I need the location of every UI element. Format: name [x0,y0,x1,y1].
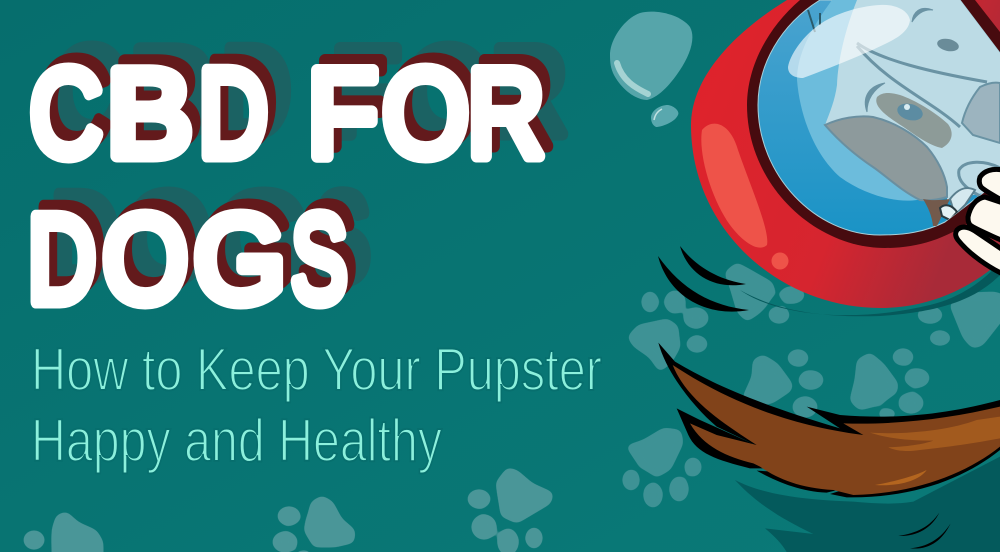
tooth [940,205,957,220]
collar fur [923,199,950,226]
title red shadow: O [391,35,477,173]
water [758,0,1000,235]
paw: lower left of tail [622,430,702,508]
title red shadow: C [38,35,110,173]
second eye [937,38,959,52]
subtitle: Happy and Healthy [31,407,442,474]
title white letters [28,45,545,329]
dog bowl [691,0,1000,308]
paw: bottom centre [467,470,551,552]
dog dark fur [825,116,947,200]
title white letters: O [103,191,188,329]
bowl inner rim [747,0,1000,248]
water drops [610,12,692,127]
title far shadow: B [130,23,216,161]
nose [962,83,1000,143]
title red shadow: R [476,35,553,173]
title far shadow: F [331,23,401,161]
bowl body [691,0,1000,308]
motion lines [658,246,749,312]
paw: bottom left [23,514,101,552]
title red shadow: B [114,35,200,173]
light reflection [797,0,1000,201]
tail fur [673,365,1000,495]
title red shadow: D [36,181,104,319]
title far shadow: C [53,23,125,161]
title white letters: R [468,45,545,183]
paw: right edge [917,294,1000,346]
dog paw fingers [956,169,1000,274]
title white letters: C [30,45,102,183]
paw: under bowl [727,265,805,324]
paw: bottom middle [272,498,353,552]
title white letters: D [199,45,268,183]
eyebrows [865,83,885,112]
title far shadow: R [491,23,568,161]
paw: upper left of tail [630,290,709,369]
title far shadow: S [314,169,370,307]
paw: middle right [852,348,930,420]
glass glare [788,5,910,78]
title white letters: S [291,191,347,329]
title red shadow: D [207,35,276,173]
title far shadow: G [217,169,309,307]
mouth lines [857,43,987,127]
title far shadow: D [51,169,119,307]
dog face [825,0,1000,200]
bowl highlight dot [772,252,788,270]
eye [897,104,923,120]
small drop [651,105,678,127]
fur wisps [808,10,820,32]
title red shadow: S [299,181,355,319]
title white letters: O [383,45,469,183]
title red shadow: G [202,181,294,319]
tail shadow [735,457,1000,552]
title far shadow: O [126,169,211,307]
title white letters: D [28,191,96,329]
title red shadow: O [111,181,196,319]
bowl highlight [701,124,767,248]
title red shadow [36,35,553,319]
tongue [950,188,975,215]
finger 1 [979,169,1000,201]
paw: middle [745,349,824,418]
large drop [610,12,692,100]
finger 2 [968,197,1000,241]
title white letters: B [106,45,192,183]
tail outline [658,343,1000,497]
title far shadow: O [406,23,492,161]
title white letters: F [308,45,378,183]
lip curl [959,162,1000,196]
tail highlights [870,417,1000,451]
paw print pattern [622,265,1000,508]
dog tail [658,343,1000,497]
title white letters: G [194,191,286,329]
bowl shadow [740,262,1000,316]
title far shadow: D [222,23,291,161]
title [28,23,568,329]
finger 3 [956,227,1000,274]
eye patch [876,93,952,148]
title far shadow [51,23,568,307]
dog in water [797,0,1000,226]
subtitle [31,336,602,474]
subtitle: How to Keep Your Pupster [31,336,602,403]
title red shadow: F [316,35,386,173]
